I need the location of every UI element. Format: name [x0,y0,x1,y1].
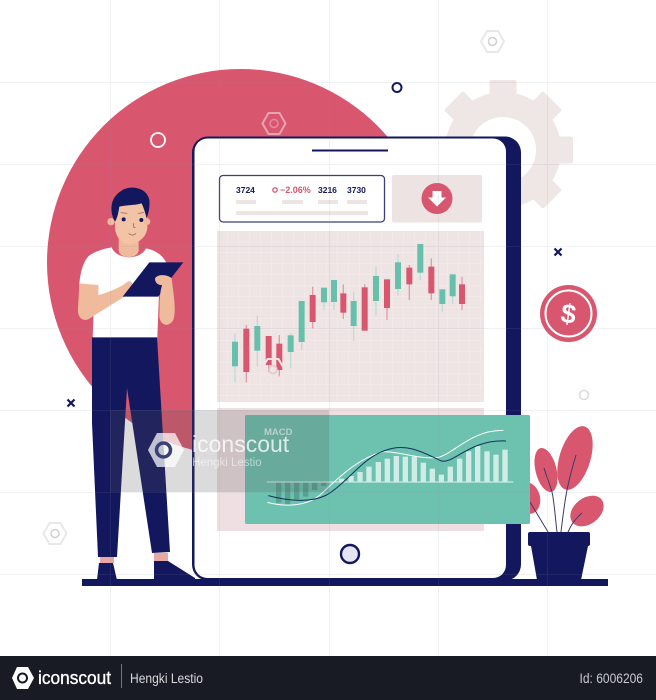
stat values: 3216 [318,185,337,195]
icon: footer logo [12,667,34,689]
cross marker left [68,400,74,406]
stat values: 3724 [236,185,255,195]
trousers [92,337,170,557]
footer author: Hengki Lestio [130,671,203,686]
lower chart panel [217,408,484,531]
icon: dollar coin: $ [559,298,578,330]
tablet body [192,136,521,580]
left arm [78,281,133,320]
navy decorative circle [392,83,402,92]
tablet in hand [123,262,183,297]
speaker [312,150,388,152]
MACD lines [267,430,503,505]
shoes [97,561,195,580]
grey decorative circle [580,390,588,400]
placeholder bars [236,200,368,215]
candlestick chart [217,231,484,402]
icon: dollar coin [540,285,597,342]
stat values: 3730 [347,185,366,195]
face [115,203,147,244]
ground line [82,579,608,586]
MACD histogram [267,430,513,505]
man [78,188,195,580]
plant [512,422,610,580]
upper body [78,188,183,337]
MACD panel [245,415,530,524]
footer divider [121,664,122,688]
neck [119,233,139,257]
watermark logo [148,431,290,469]
watermark brand: iconscout [192,431,290,457]
watermark hexagons [44,31,504,544]
socks [100,553,168,563]
candles [232,244,465,382]
chart background [217,231,484,402]
tablet [192,136,521,580]
home button [341,545,359,563]
stems [530,455,582,532]
watermark band [110,410,329,492]
gear [433,80,573,209]
shirt [79,247,167,337]
tablet screen [194,138,506,578]
footer brand: iconscout [38,668,111,688]
MACD label: MACD [264,427,293,438]
facial lines [121,213,144,235]
sell button panel [392,175,482,222]
footer id: Id: 6006206 [580,671,643,686]
pot [528,532,590,580]
stat values: −2.06% [280,185,311,195]
background circle [47,69,434,456]
eyes [122,217,126,221]
small decorative circle on red [151,133,165,147]
footer bar [0,656,656,700]
icon: down arrow [422,183,452,214]
hair [111,188,149,222]
leaves [512,422,610,533]
cross marker right [554,248,562,256]
status dot [273,188,277,192]
stat values [236,185,366,195]
stats panel [220,176,384,222]
right hand [155,275,175,325]
watermark author: Hengki Lestio [192,457,262,469]
